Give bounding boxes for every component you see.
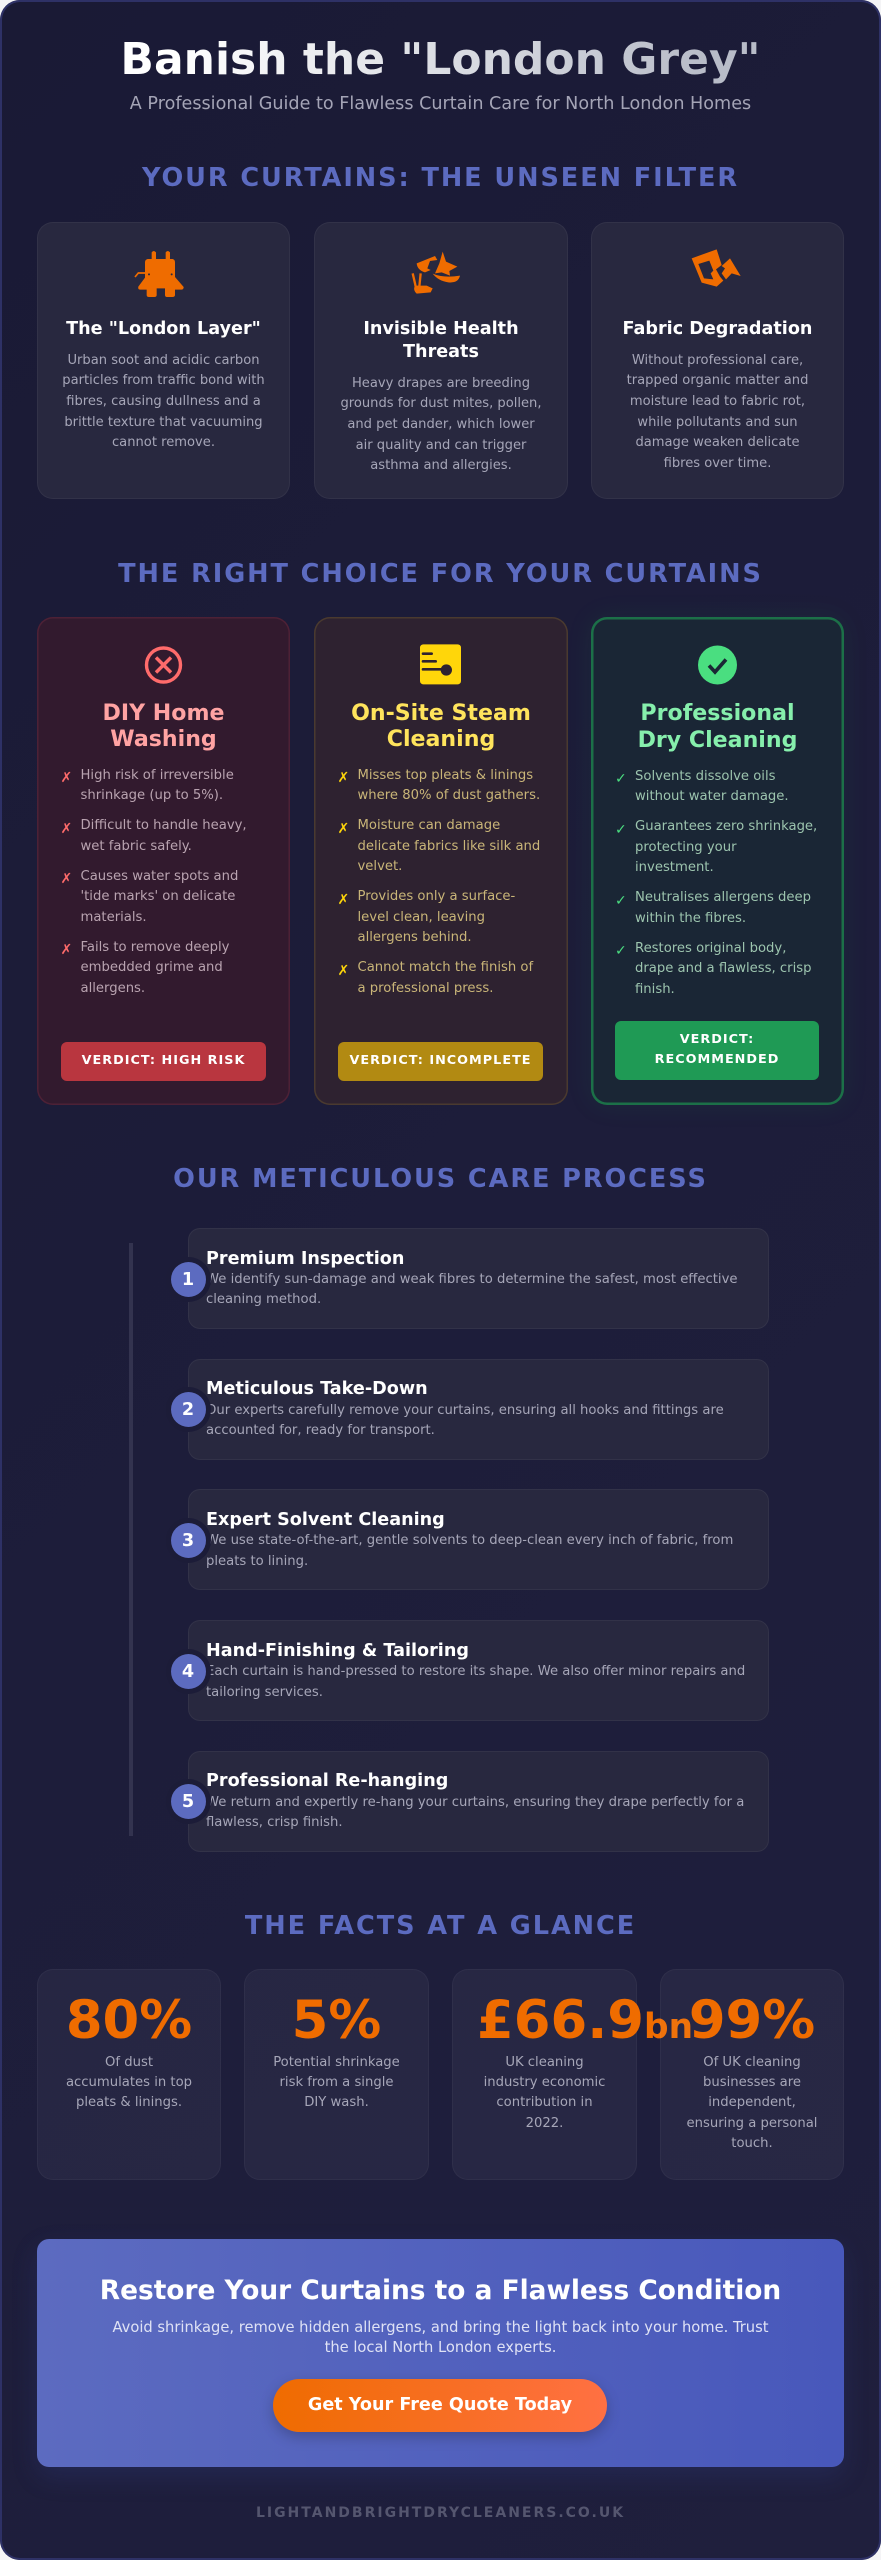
card title: Dry Cleaning [638, 727, 797, 753]
heading: the right choice: THE RIGHT CHOICE FOR YOUR CURTAINS [118, 558, 763, 588]
list of drawbacks: materials. [80, 910, 147, 925]
heading: facts: THE FACTS AT A GLANCE [245, 1910, 636, 1940]
list of benefits: ✓ [615, 893, 627, 909]
stat text: Of UK cleaning [703, 2054, 801, 2070]
list of benefits: Solvents dissolve oils [635, 768, 776, 784]
stat card: 99% [660, 1969, 844, 2180]
icon: allergens [412, 252, 460, 294]
stat value: 99% [689, 1990, 815, 2051]
stat text: independent, [708, 2095, 796, 2110]
card text: fibres over time. [664, 456, 771, 471]
card title: Invisible Health [363, 319, 519, 339]
list of drawbacks [60, 768, 247, 996]
panel: DIY home washing [37, 617, 290, 1105]
panel: invisible health threats [314, 222, 568, 499]
stat text: Potential shrinkage [273, 2054, 400, 2070]
title [0, 32, 881, 88]
list of benefits [615, 768, 817, 997]
step 4 [188, 1620, 769, 1721]
stat text: UK cleaning [505, 2054, 584, 2070]
card title [363, 319, 519, 362]
heading: your curtains: YOUR CURTAINS: THE UNSEEN FILTER [142, 162, 739, 192]
verdict badge [615, 1021, 819, 1080]
icon: steam document [420, 644, 461, 684]
card text: cannot remove. [112, 435, 215, 450]
list of drawbacks: ✗ [338, 892, 349, 908]
card text: Heavy drapes are breeding [352, 376, 530, 391]
step text [206, 1533, 733, 1569]
list of drawbacks: Cannot match the finish of [358, 960, 533, 975]
card text: damage weaken delicate [635, 435, 800, 450]
list of drawbacks [338, 768, 540, 996]
list of benefits: Guarantees zero shrinkage, [635, 819, 817, 834]
list of drawbacks: embedded grime and [80, 960, 223, 975]
verdict badge: VERDICT: HIGH RISK [82, 1053, 245, 1068]
card text: Urban soot and acidic carbon [67, 353, 260, 368]
list of drawbacks: allergens. [80, 981, 145, 996]
stat text: DIY wash. [304, 2095, 369, 2110]
step text: flawless, crisp finish. [206, 1815, 343, 1830]
step 2 [188, 1359, 769, 1460]
stat value: 80% [66, 1990, 192, 2051]
card text [627, 353, 808, 471]
card text: and pet dander, which lower [347, 417, 535, 432]
cta text: the local North London experts. [325, 2339, 556, 2356]
list of drawbacks: Causes water spots and [80, 869, 238, 884]
list of benefits: investment. [635, 860, 714, 875]
panel: the London layer [37, 222, 290, 499]
list of drawbacks: velvet. [358, 859, 402, 874]
stat card: 66.9bn [452, 1969, 637, 2180]
list of drawbacks: Moisture can damage [358, 818, 500, 833]
list of benefits: finish. [635, 982, 675, 997]
stat value: 5% [292, 1990, 381, 2051]
list of drawbacks: wet fabric safely. [80, 839, 192, 854]
step number [170, 1523, 206, 1558]
card title: Washing [110, 726, 217, 752]
step text: We identify sun-damage and weak fibres to determine the safest, most effective [206, 1272, 738, 1287]
step text: We use state-of-the-art, gentle solvents to deep-clean every inch of fabric, from [206, 1533, 733, 1548]
list of drawbacks: delicate fabrics like silk and [358, 839, 540, 854]
list of benefits: within the fibres. [635, 911, 746, 926]
card title: On-Site Steam [351, 700, 531, 726]
card title: Cleaning [387, 726, 495, 752]
list of drawbacks: Difficult to handle heavy, [80, 818, 247, 833]
step title: Meticulous Take-Down [206, 1379, 428, 1399]
step text: accounted for, ready for transport. [206, 1423, 435, 1438]
list of benefits: ✓ [615, 771, 627, 787]
list of drawbacks: Misses top pleats & linings [358, 768, 533, 783]
list of drawbacks: Provides only a surface- [358, 889, 515, 904]
list of drawbacks: a professional press. [358, 981, 493, 996]
verdict badge [338, 1042, 543, 1080]
list of drawbacks: 'tide marks' on delicate [80, 889, 235, 904]
heading: care process: OUR METICULOUS CARE PROCESS [173, 1164, 708, 1194]
cta heading: Restore Your Curtains to a Flawless Condition [100, 2275, 781, 2306]
list of drawbacks: ✗ [60, 942, 72, 958]
icon: check circle [698, 646, 737, 684]
stat text: industry economic [484, 2075, 605, 2090]
card title: Fabric Degradation [623, 319, 812, 339]
step title: Premium Inspection [206, 1248, 404, 1268]
list of drawbacks: where 80% of dust gathers. [358, 788, 540, 803]
stat text [484, 2054, 605, 2131]
stat text: businesses are [703, 2075, 801, 2090]
stat text: ensuring a personal [687, 2116, 817, 2131]
card title: DIY Home [103, 700, 224, 726]
icon: torn fabric [692, 249, 741, 287]
panel: on-site steam cleaning [314, 617, 568, 1105]
stat text: contribution in [496, 2095, 593, 2110]
stat text [687, 2054, 817, 2151]
list of drawbacks: ✗ [60, 821, 72, 837]
list of drawbacks: Fails to remove deeply [80, 940, 229, 955]
cta text [112, 2319, 769, 2356]
step text: pleats to lining. [206, 1554, 308, 1569]
step number [170, 1654, 206, 1689]
list of drawbacks: level clean, leaving [358, 910, 485, 925]
list of drawbacks: ✗ [338, 821, 349, 837]
step text: Our experts carefully remove your curtains, ensuring all hooks and fittings are [206, 1403, 724, 1418]
list of drawbacks: ✗ [338, 770, 349, 786]
card title [638, 700, 797, 753]
stat text [273, 2054, 400, 2110]
panel: call to action [37, 2239, 844, 2467]
list of benefits: Restores original body, [635, 941, 786, 956]
card text: while pollutants and sun [637, 415, 798, 430]
card text: brittle texture that vacuuming [64, 415, 263, 430]
list of benefits: protecting your [635, 840, 737, 855]
verdict badge: VERDICT: INCOMPLETE [349, 1053, 532, 1068]
list of drawbacks: shrinkage (up to 5%). [80, 788, 223, 803]
step 1 [188, 1228, 769, 1329]
step 3 [188, 1489, 769, 1590]
card text: fibres, causing dullness and a [66, 394, 261, 409]
list of drawbacks: ✗ [338, 963, 349, 979]
list of drawbacks: ✗ [60, 871, 72, 887]
stat text: pleats & linings. [76, 2095, 182, 2110]
step text [206, 1795, 744, 1830]
title: Banish the "London Grey" [120, 34, 761, 84]
step text: Each curtain is hand-pressed to restore its shape. We also offer minor repairs and [206, 1664, 745, 1679]
step text: We return and expertly re-hang your curtains, ensuring they drape perfectly for a [206, 1795, 744, 1810]
icon: soot plug [134, 251, 184, 297]
step title: Hand-Finishing & Tailoring [206, 1641, 469, 1661]
stat value: £66.9bn [477, 1990, 693, 2051]
subtitle: A Professional Guide to Flawless Curtain Care for North London Homes [130, 94, 751, 114]
stat text: 2022. [526, 2116, 563, 2131]
card text: air quality and can trigger [356, 438, 526, 453]
stat card: 80% [37, 1969, 221, 2180]
cta text: Avoid shrinkage, remove hidden allergens, and bring the light back into your home. Trust [112, 2319, 769, 2336]
list of benefits: Neutralises allergens deep [635, 890, 811, 905]
card text: particles from traffic bond with [62, 373, 265, 388]
cta button: Get Your Free Quote Today [308, 2395, 572, 2415]
card title: The "London Layer" [66, 319, 261, 339]
step number: 2 [182, 1400, 194, 1420]
card title: Threats [403, 342, 479, 362]
step number: 4 [182, 1662, 194, 1682]
step number [170, 1262, 206, 1296]
card text: trapped organic matter and [627, 373, 808, 388]
footer: LIGHTANDBRIGHTDRYCLEANERS.CO.UK [256, 2505, 625, 2521]
list of benefits: drape and a flawless, crisp [635, 961, 811, 976]
list of drawbacks: allergens behind. [358, 930, 472, 945]
step number [170, 1392, 206, 1427]
list of benefits: ✓ [615, 822, 627, 838]
panel: fabric degradation [591, 222, 844, 499]
card text [62, 353, 265, 450]
step text: tailoring services. [206, 1685, 323, 1700]
stat text: accumulates in top [66, 2075, 192, 2090]
step title: Expert Solvent Cleaning [206, 1510, 445, 1530]
list of benefits: ✓ [615, 943, 627, 959]
step text [206, 1403, 724, 1438]
stat text: risk from a single [280, 2075, 393, 2090]
stat text: Of dust [105, 2054, 153, 2070]
stat card: 5% [244, 1969, 429, 2180]
list of benefits: without water damage. [635, 789, 789, 804]
stat text [66, 2054, 192, 2110]
card text: asthma and allergies. [370, 458, 512, 473]
step title: Professional Re-hanging [206, 1771, 448, 1791]
list of drawbacks: High risk of irreversible [80, 768, 234, 783]
verdict badge [61, 1042, 266, 1080]
card title [351, 700, 531, 752]
card text: grounds for dust mites, pollen, [340, 396, 542, 411]
stat text: touch. [731, 2136, 773, 2151]
verdict badge: VERDICT: [680, 1032, 754, 1047]
card text: Without professional care, [632, 353, 803, 368]
cta button [273, 2379, 607, 2432]
step number: 5 [182, 1792, 194, 1812]
card title [103, 700, 224, 752]
card text [340, 376, 542, 473]
verdict badge: RECOMMENDED [655, 1052, 779, 1067]
list of drawbacks: ✗ [60, 770, 72, 786]
card text: moisture lead to fabric rot, [630, 394, 805, 409]
step 5 [188, 1751, 769, 1852]
step text [206, 1664, 745, 1700]
step text [206, 1272, 738, 1307]
step text: cleaning method. [206, 1292, 321, 1307]
card title: Professional [640, 700, 795, 726]
icon: cross circle [144, 646, 182, 684]
step number [170, 1784, 206, 1819]
step number: 1 [182, 1270, 194, 1290]
step number: 3 [182, 1531, 194, 1551]
panel: professional dry cleaning [591, 617, 844, 1105]
